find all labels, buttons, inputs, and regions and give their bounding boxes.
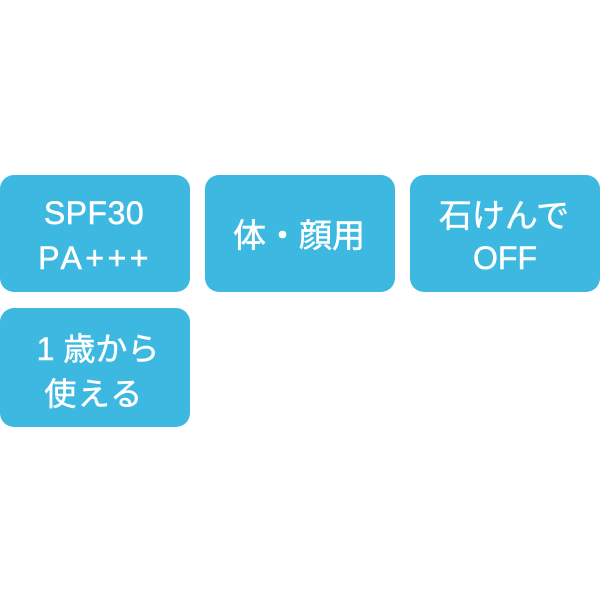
badge: soap off	[410, 175, 600, 292]
badge: from age one: 1 歳から	[37, 331, 159, 367]
badge: from age one: 使える	[44, 376, 144, 412]
badge: from age one	[0, 308, 190, 427]
badge: SPF30 PA+++	[0, 175, 190, 292]
badge: soap off: 石けんで	[439, 197, 569, 234]
badge: SPF30 PA+++: PA+++	[38, 240, 152, 276]
badge: soap off: OFF	[473, 240, 537, 276]
badge: SPF30 PA+++: SPF30	[44, 195, 144, 231]
badge: body and face	[205, 175, 395, 292]
badge: body and face: 体・顔用	[233, 217, 365, 254]
